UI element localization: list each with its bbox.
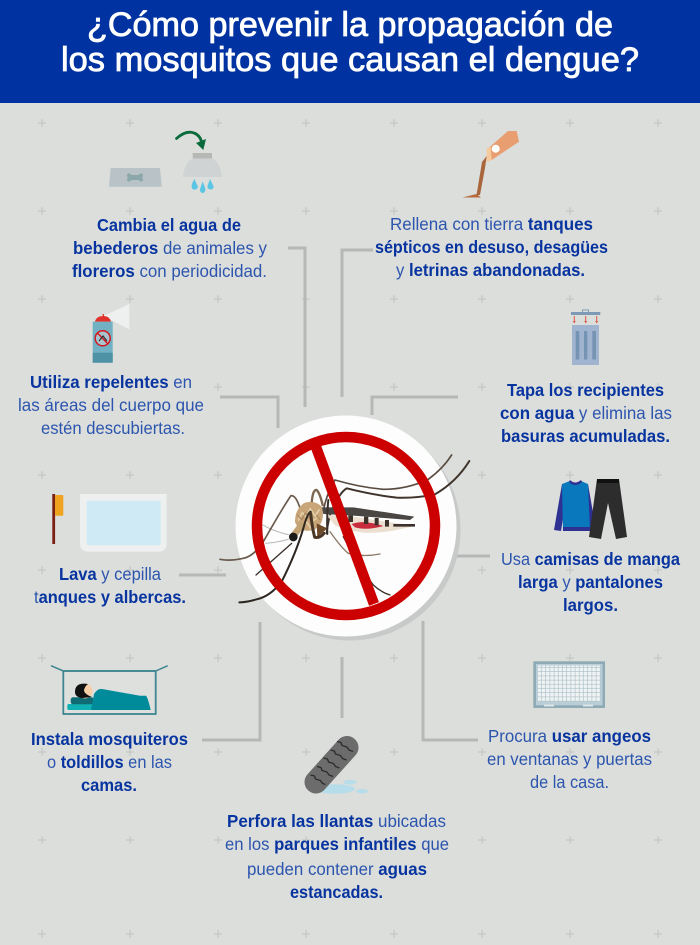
text: Cambia el agua: bebederos de animales y	[73, 238, 267, 258]
title banner	[0, 0, 700, 103]
title banner: los mosquitos que causan el dengue?	[61, 41, 639, 79]
text: Utiliza repelentes: estén descubiertas.	[41, 418, 185, 438]
icon: person under mosquito net	[51, 666, 168, 714]
icon: spray repellent	[93, 304, 129, 363]
text: Rellena con tierra: sépticos en desuso, desagües	[375, 237, 608, 257]
text: Cambia el agua: Cambia el agua de	[97, 215, 241, 235]
text: Perfora las llantas: Perfora las llantas ubicadas	[227, 811, 446, 831]
icon: trash can	[571, 310, 600, 365]
text: Instala mosquiteros: Instala mosquiteros	[31, 729, 188, 749]
text: Procura usar angeos: en ventanas y puertas	[487, 749, 652, 769]
icon: window screen	[533, 661, 605, 708]
text: Rellena con tierra: y letrinas abandonadas.	[396, 260, 585, 280]
connector lines	[179, 248, 490, 740]
text: Tapa los recipientes: basuras acumuladas.	[501, 426, 670, 446]
text: Usa camisas	[501, 549, 680, 615]
text: Usa camisas: larga y pantalones	[518, 572, 663, 592]
text: Tapa los recipientes	[500, 380, 672, 446]
text: Lava y cepilla	[34, 564, 186, 607]
text: Cambia el agua	[72, 215, 267, 281]
text: Perfora las llantas	[225, 811, 449, 902]
mosquito illustration	[220, 455, 469, 602]
text: Instala mosquiteros	[31, 729, 188, 795]
text: Procura usar angeos	[487, 726, 652, 792]
icon: long sleeve shirt and trousers	[554, 479, 627, 539]
text: Rellena con tierra: Rellena con tierra tanques	[390, 214, 593, 234]
text: Lava y cepilla: tanques y albercas.	[34, 587, 186, 607]
text: Lava y cepilla: Lava y cepilla	[59, 564, 161, 584]
central no-mosquito sign	[220, 416, 469, 640]
prohibition ring and bar	[257, 437, 435, 615]
title banner: ¿Cómo prevenir la propagación de	[87, 6, 613, 44]
text: Utiliza repelentes: Utiliza repelentes en	[30, 372, 192, 392]
icon: pouring soil bag	[462, 131, 519, 198]
text: Utiliza repelentes	[18, 372, 204, 438]
text: Instala mosquiteros: o toldillos en las	[47, 752, 172, 772]
text: Usa camisas: largos.	[563, 595, 618, 615]
text: Perfora las llantas: estancadas.	[290, 882, 383, 902]
text: Rellena con tierra	[375, 214, 608, 280]
icon: brush and tub	[52, 494, 167, 552]
text: Procura usar angeos: de la casa.	[530, 772, 609, 792]
text: Tapa los recipientes: Tapa los recipientes	[507, 380, 664, 400]
icon: tire and puddle	[310, 742, 368, 794]
text: Perfora las llantas: en los parques infantiles que	[225, 834, 449, 854]
text: Cambia el agua: floreros con periodicidad.	[72, 261, 267, 281]
text: Procura usar angeos: Procura usar angeos	[488, 726, 651, 746]
text: Utiliza repelentes: las áreas del cuerpo que	[18, 395, 204, 415]
text: Usa camisas: Usa camisas de manga	[501, 549, 680, 569]
text: Perfora las llantas: pueden contener aguas	[247, 859, 427, 879]
text: Tapa los recipientes: con agua y elimina las	[500, 403, 672, 423]
text: Instala mosquiteros: camas.	[81, 775, 137, 795]
icon: pet bowl and shower	[109, 132, 222, 193]
